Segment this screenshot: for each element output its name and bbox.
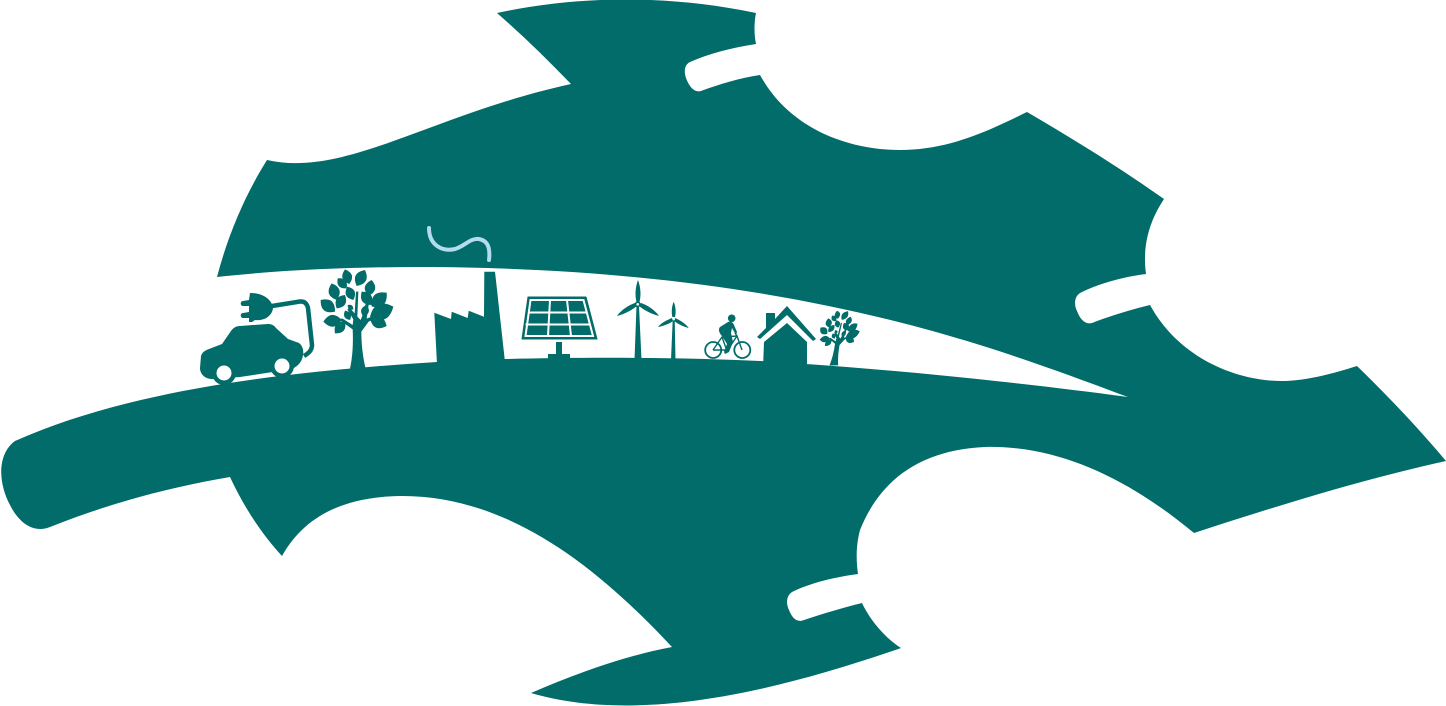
icon: large wind turbine bbox=[617, 280, 659, 360]
icon: large tree bbox=[317, 267, 397, 369]
icon: factory bbox=[434, 272, 505, 364]
icon: small wind turbine bbox=[658, 302, 689, 360]
icon: small tree bbox=[811, 310, 866, 365]
icon: cyclist bbox=[705, 314, 750, 358]
icon: house bbox=[757, 306, 816, 368]
icon: smoke plume bbox=[429, 228, 489, 260]
icon: electric car with plug bbox=[200, 293, 312, 385]
icon: solar panel bbox=[522, 297, 597, 360]
